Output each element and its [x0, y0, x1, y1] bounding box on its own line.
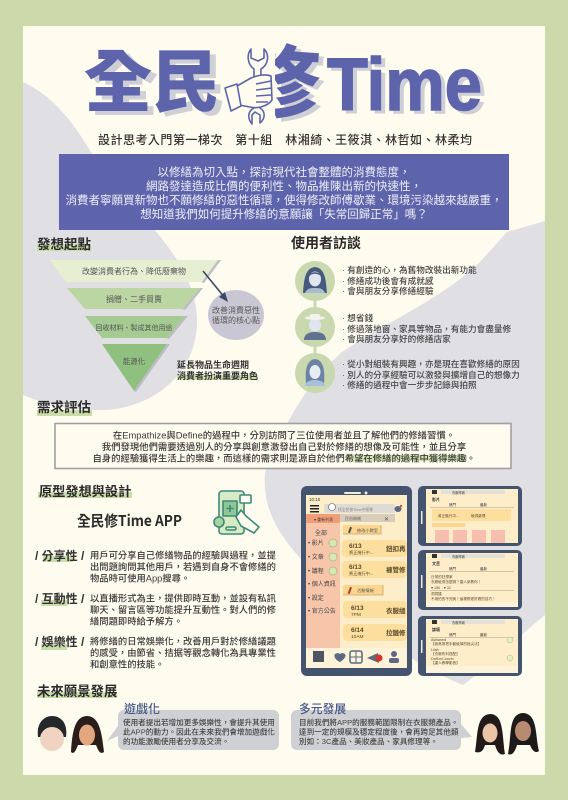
needs box [55, 424, 511, 468]
schedule cards: 將正進行中... [349, 549, 373, 556]
phone mockup: forum: DaRonCoover [431, 657, 455, 661]
icon: woman curly hair [305, 359, 325, 386]
bubble text: 目前我們將APP的服務範圍限制在衣服類產品。 [299, 717, 458, 727]
funnel layer 3 [85, 316, 188, 339]
subtitle: 設計思考入門第一梯次 第十組 林湘綺、王筱淇、林哲如、林柔均 [98, 132, 472, 147]
schedule cards: 衣服縫 [386, 606, 406, 615]
feature: entertainment [35, 634, 277, 670]
section buttons: 修改小教室 [357, 527, 378, 534]
intro text: 消費者寧願買新物也不願修繕的惡性循環，使得修改師傅歇業、環境污染越來越嚴重， [66, 193, 502, 207]
funnel note: 消費者扮演重要角色 [177, 370, 258, 381]
speech bubble: diversification [291, 702, 472, 750]
phone mockup: forum: 【衣服布料搭配】 [431, 651, 460, 656]
filter chip [340, 514, 395, 523]
schedule cards: 6/13 [349, 564, 362, 571]
sidebar: • 影片 [308, 539, 324, 547]
arrow to core point [203, 271, 228, 302]
portraits left [38, 716, 104, 753]
schedule cards: 6/13 [349, 543, 362, 550]
persona 1 [295, 261, 477, 301]
bubble text: 使用者提出若增加更多娛樂性，會提升其使用 [123, 717, 275, 727]
icon: app phone [214, 491, 259, 534]
persona 2 text: · 會與朋友分享好的修繕店家 [342, 333, 451, 344]
interaction text [90, 592, 277, 626]
sidebar: • 設定 [308, 594, 324, 602]
entertainment text: 和創意性的技能。 [90, 658, 164, 670]
heading: prototype: 原型發想與設計 [39, 483, 131, 499]
persona 2 text: · 修過落地窗、家具等物品，有能力會盡量修 [342, 323, 512, 334]
schedule cards: 拉鏈修 [386, 628, 406, 637]
sidebar: • 文章 [308, 553, 324, 561]
persona 3 text [342, 358, 520, 390]
persona 2 text [342, 312, 512, 344]
sharing text: 物品時可使用App搜尋。 [90, 572, 190, 584]
funnel layer 4 [102, 344, 170, 392]
phone mockup: articles: 衣服修補 [452, 554, 466, 559]
phone mockup: articles [418, 550, 522, 610]
interaction text: 以直播形式為主，提供即時互動，並設有私訊 [90, 592, 277, 604]
phone mockup: articles: ♥ 150 ♥ 32 [431, 586, 451, 590]
persona connector [314, 290, 316, 370]
funnel layer 1 [50, 260, 221, 283]
feature: interaction: / 互動性 / [35, 591, 85, 606]
feature: entertainment: / 娛樂性 / [35, 634, 85, 649]
background blob right [265, 221, 545, 685]
funnel chart [50, 260, 221, 392]
icon: man with hat [304, 314, 326, 340]
phone mockup: articles: 熱門 [449, 566, 456, 571]
app name: 全民修Time APP [77, 510, 182, 531]
portrait 3 [475, 714, 505, 755]
bubble text: 的功能激勵使用者分享及交流。 [123, 736, 229, 746]
bubble text: 達到一定的規模及穩定程度後，會再跨足其他類 [299, 726, 459, 736]
phone mockup: main [301, 486, 412, 676]
funnel layer 4: 能源化 [123, 356, 146, 366]
needs text: 自身的經驗獲得生活上的樂趣，而這樣的需求則是源自於他們希望在修繕的過程中獲得樂趣。 [92, 452, 476, 464]
funnel note [177, 359, 258, 381]
core point circle: 循環的核心點 [212, 315, 260, 325]
intro text [66, 165, 502, 221]
sharing text: 用戶可分享自己修繕物品的經驗與過程，並提 [90, 550, 277, 560]
sidebar: • 官方公告 [308, 607, 336, 615]
entertainment text [90, 636, 277, 670]
phone mockup: main: 10:10 [309, 497, 321, 502]
needs text: 我們發現他們需要透過別人的分享與創意激發出自己對於修繕的想像及可能性，並且分享 [102, 441, 466, 452]
entertainment text: 將修繕的日常娛樂化，改善用戶對於修繕議題 [90, 636, 277, 646]
heading: interviews: 使用者訪談 [291, 235, 361, 251]
bubble title: 遊戲化 [124, 701, 160, 716]
icon: wrench and hand [225, 49, 272, 124]
phone mockup: articles: 最新 [480, 566, 488, 571]
phone mockup: articles: 洞洞達 [431, 591, 442, 596]
sharing text [90, 550, 277, 584]
sidebar: 全部 [315, 529, 327, 537]
bubble text: 別如：3C產品、美妝產品、家具修理等。 [299, 736, 438, 746]
funnel layer 1: 改變消費者行為、降低廢棄物 [82, 266, 186, 276]
core point circle: 改善消費惡性 [212, 305, 260, 315]
funnel note: 延長物品生命週期 [177, 359, 249, 370]
phone mockup: forum: Lilah [431, 648, 439, 652]
schedule cards [342, 540, 407, 641]
interaction text: 繕問題即時給予解方。 [90, 616, 183, 626]
portrait 1 [38, 716, 66, 751]
phone mockup: videos: 破洞處理 [471, 513, 486, 518]
persona 1 text: · 修繕成功後會有成就感 [342, 275, 434, 286]
intro box [59, 154, 509, 230]
phone mockup: videos [418, 486, 522, 546]
phone mockup: forum: 最新 [480, 632, 488, 637]
phone mockup: videos: 最新 [480, 502, 488, 507]
nav icons [313, 651, 399, 663]
intro text: 以修繕為切入點，探討現代社會整體的消費態度， [158, 165, 410, 179]
bubble text [123, 717, 275, 746]
bubble text: 此APP的動力。因此在未來我們會增加遊戲化 [123, 726, 275, 736]
phone mockup: articles: 文章 [432, 560, 440, 566]
icon: woman long hair [303, 267, 327, 293]
phone mockup: videos: 將正進行中... [438, 513, 459, 518]
heading: ideation: 發想起點 [37, 236, 91, 252]
sidebar: • 議程 [308, 567, 324, 575]
filter chip: ✕ [384, 517, 389, 523]
phone mockup: videos: 熱門 [449, 502, 456, 507]
schedule cards: 10AM [351, 634, 364, 640]
funnel layer 2: 捐贈、二手買賣 [106, 294, 162, 304]
phone mockup: forum: 衣服修補 [452, 620, 466, 625]
schedule cards: 鈕扣再 [386, 544, 406, 553]
phone mockup: forum: 論壇 [432, 626, 440, 632]
title shadow: Time [331, 46, 486, 129]
portraits right [475, 713, 539, 755]
search bar [310, 504, 402, 513]
funnel layer 2 [67, 288, 203, 310]
persona 1 text: · 會與朋友分享修繕經驗 [342, 285, 434, 296]
phone mockup: forum: 熱門 [449, 632, 456, 637]
persona 3 text: · 別人的分享經驗可以激發與擴增自己的想像力 [342, 369, 520, 380]
phone mockup: videos: 影片 [432, 496, 440, 502]
phone mockup: articles: 衣服破洞怎麼辦？達人來教你！ [431, 579, 481, 584]
title shadow [90, 46, 486, 129]
search bar: 找全民修Time中搜尋 [338, 507, 373, 512]
phone mockup: articles: 不用怕的不完美！這樣修更好看的技巧！ [431, 596, 496, 601]
needs text [92, 430, 476, 464]
schedule cards: 7PM [351, 612, 361, 618]
speech bubble: gamification [107, 701, 279, 750]
feature: sharing: / 分享性 / [35, 548, 85, 563]
intro text: 想知道我們如何提升修繕的意願讓「失常回歸正常」嗎？ [140, 207, 428, 221]
heading: future: 未來願景發展 [37, 684, 117, 699]
intro text: 網路發達造成比價的便利性、物品推陳出新的快速性， [146, 179, 422, 193]
sidebar: • 個人資訊 [308, 580, 336, 588]
sharing text: 出問題詢問其他用戶，若遇到自身不會修繕的 [90, 561, 276, 572]
persona 2 [295, 307, 512, 347]
section buttons: 活動情報 [357, 587, 375, 594]
persona 2 text: · 想省錢 [342, 312, 374, 323]
phone mockup: forum [418, 616, 522, 676]
persona 1 text: · 有創造的心，為舊物改裝出新功能 [342, 264, 477, 275]
persona 3 text: · 修繕的過程中會一步步記錄與拍照 [342, 379, 477, 390]
persona 3 [295, 353, 520, 393]
entertainment text: 的感受，由節省、拮据等觀念轉化為具專業性 [90, 647, 276, 658]
funnel layer 3: 回收材料、製成其他用途 [96, 323, 172, 332]
schedule cards: 將正進行中... [349, 570, 373, 577]
heading: needs: 需求評估 [37, 399, 91, 415]
title word Time: Time [327, 43, 482, 126]
title shadow: 全民 [90, 49, 226, 125]
phone mockup: forum: 【達人教學影音】 [431, 660, 460, 665]
bubble title: 多元發展 [299, 702, 346, 716]
core point circle [208, 290, 264, 340]
bubble text [299, 717, 459, 746]
feature: interaction [35, 591, 277, 626]
phone mockup: videos: 衣服修補 [452, 490, 466, 495]
phone mockup: forum: 【我常常把手套破掉的指尖法】 [431, 641, 481, 646]
needs text: 在Empathize與Define的過程中，分別訪問了三位使用者並且了解他們的修繕習慣。 [113, 430, 455, 440]
title character xiu: 修 [241, 40, 327, 134]
title main characters: 全民 [84, 45, 220, 121]
phone mockup: forum: Ashlaned [431, 638, 446, 642]
interaction text: 聊天、留言區等功能提升互動性。對人們的修 [90, 604, 277, 615]
section buttons [343, 525, 383, 595]
background blob left [23, 82, 197, 410]
schedule cards: 6/13 [351, 605, 364, 612]
highlight [346, 455, 467, 461]
sidebar: ▾ 重新列表 [314, 516, 333, 522]
title [85, 43, 484, 125]
sidebar [306, 514, 340, 648]
title character xiu: 修 [237, 37, 323, 131]
filter chip: 民俗縫補 [345, 515, 361, 521]
phone mockup: articles: 日常的狂想家 [431, 574, 453, 579]
schedule cards: 褲管修 [386, 565, 406, 574]
portrait 2 [71, 716, 104, 753]
feature: sharing [35, 548, 277, 584]
persona 1 text [342, 264, 477, 296]
title character xiu [275, 43, 324, 122]
schedule cards: 6/14 [351, 627, 364, 634]
portrait 4 [508, 713, 539, 755]
persona 3 text: · 從小對組裝有興趣，亦是現在喜歡修繕的原因 [342, 358, 520, 369]
